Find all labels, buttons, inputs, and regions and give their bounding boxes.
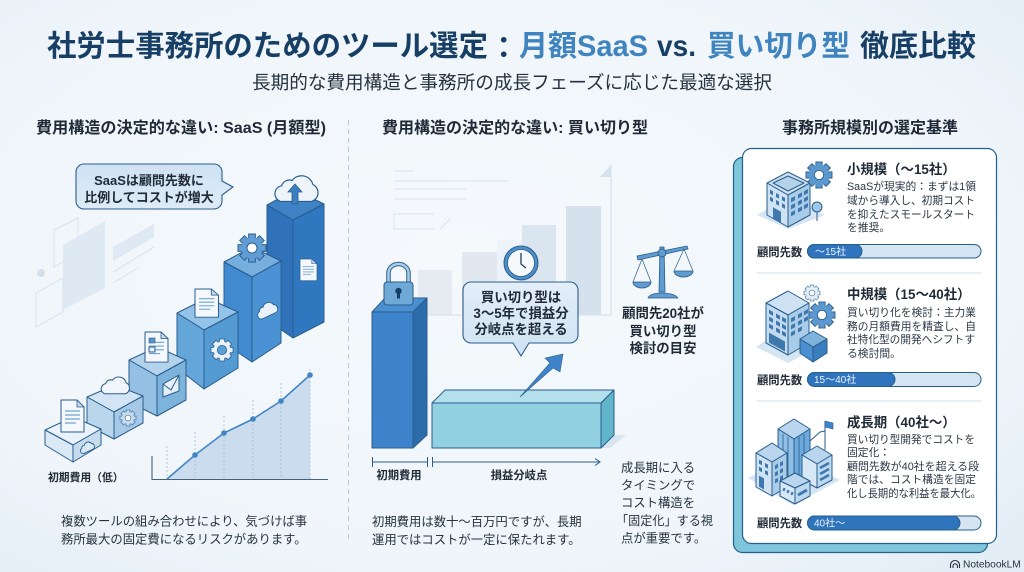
text: SaaS risk: 複数ツールの組み合わせにより、気づけば事 — [61, 514, 307, 528]
tier: medium: 中規模（15〜40社） — [847, 286, 971, 302]
tier: small — [757, 161, 981, 259]
tier: small: 顧問先数 — [757, 245, 803, 259]
stair step 1 with document and cloud — [45, 400, 101, 462]
tier: growth: 化し長期的な利益を最大化。 — [847, 486, 981, 500]
watermark: NotebookLM: NotebookLM — [963, 560, 1021, 570]
title: vs. — [657, 30, 696, 63]
text: SaaS risk — [61, 514, 307, 546]
progress bar: up to 15 clients — [808, 244, 981, 258]
tier: medium: 買い切り化を検討：主力業 — [847, 305, 976, 319]
tier: growth: 成長期（40社〜） — [847, 414, 956, 430]
title: 月額SaaS — [519, 30, 648, 63]
heading: selection criteria column: 事務所規模別の選定基準 — [782, 118, 958, 137]
tier: growth: 買い切り型開発でコストを — [847, 432, 975, 446]
stair step 4 with document and gear — [177, 289, 238, 389]
text: growth phase note: コスト構造を — [621, 496, 695, 510]
tall blue bar with lock: initial cost — [372, 264, 427, 448]
text: 20 clients guideline: 顧問先20社が — [622, 305, 705, 321]
label: initial cost: 初期費用 — [376, 468, 422, 482]
callout: SaaS cost grows: SaaSは顧問先数に — [94, 173, 204, 188]
tier: small: SaaSが現実的：まずは1領 — [847, 179, 976, 193]
line chart: cost growth — [152, 369, 328, 480]
label: initial cost low: 初期費用（低） — [48, 470, 124, 484]
text: growth phase note: タイミングで — [621, 478, 695, 492]
wide teal box: long-term flat cost — [432, 390, 626, 448]
tier: growth: 固定化： — [847, 446, 890, 459]
label: breakeven: 損益分岐点 — [491, 468, 547, 482]
stair step 5 with gear and cloud — [224, 234, 281, 362]
panel: buyout cost structure — [372, 165, 713, 547]
tier: medium: 務の月額費用を精査し、自 — [847, 319, 976, 333]
tier: growth: 階では、コスト構造を固定 — [847, 472, 976, 486]
text: buyout explanation — [372, 514, 582, 547]
timeline axis — [372, 457, 600, 467]
text: growth phase note — [616, 461, 713, 546]
text: 20 clients guideline: 検討の目安 — [630, 340, 696, 356]
text: 20 clients guideline: 買い切り型 — [630, 324, 696, 339]
text: growth phase note: 点が重要です。 — [621, 530, 706, 546]
tier: medium: 社特化型の開発へシフトす — [847, 332, 975, 346]
stair step 3 with checklist and envelope — [129, 332, 186, 416]
callout: breakeven in 3-5 years: 分岐点を超える — [474, 321, 568, 337]
text: buyout explanation: 運用ではコストが一定に保たれます。 — [372, 532, 581, 547]
callout: breakeven in 3-5 years: 買い切り型は — [481, 290, 561, 305]
title: 徹底比較 — [860, 30, 976, 63]
arrow: rising to breakeven — [520, 354, 563, 397]
title — [47, 30, 976, 65]
panel: SaaS cost structure — [36, 164, 328, 546]
progress bar: 40 clients or more: 40社〜 — [814, 516, 845, 530]
callout: SaaS cost grows — [76, 164, 233, 209]
text: SaaS risk: 務所最大の固定費になるリスクがあります。 — [61, 532, 307, 546]
tier: growth — [748, 414, 981, 530]
tier: medium: 顧問先数 — [757, 373, 803, 387]
tier: small: 域から導入し、初期コスト — [847, 193, 975, 207]
callout: breakeven in 3-5 years: 3〜5年で損益分 — [473, 305, 569, 321]
tier: growth: 顧問先数 — [757, 516, 803, 530]
progress bar: 40 clients or more — [808, 516, 981, 530]
tier: small: を抑えたスモールスタート — [847, 207, 975, 221]
heading: buyout column: 費用構造の決定的な違い: 買い切り型 — [382, 118, 648, 137]
progress bar: 15 to 40 clients — [808, 372, 981, 386]
tier: small: 小規模（〜15社） — [847, 161, 956, 177]
progress bar: up to 15 clients: 〜15社 — [815, 245, 846, 258]
text: growth phase note: 「固定化」する視 — [616, 514, 713, 528]
icon: small building — [757, 162, 832, 229]
panel: selection criteria by firm size — [734, 148, 996, 552]
text: buyout explanation: 初期費用は数十〜百万円ですが、長期 — [372, 514, 582, 529]
icon: medium building with gears and box — [756, 285, 835, 363]
title: ： — [489, 32, 519, 65]
text: growth phase note: 成長期に入る — [621, 461, 695, 475]
stair step 6 with upload cloud and document — [267, 176, 324, 338]
text: 20 clients guideline — [622, 305, 705, 356]
stair step 2 with cloud and gear — [87, 377, 143, 439]
title: 社労士事務所のためのツール選定 — [47, 30, 488, 63]
callout: breakeven in 3-5 years — [463, 282, 578, 356]
icon: balance scale — [633, 246, 693, 298]
tier: medium — [756, 285, 981, 387]
progress bar: 15 to 40 clients: 15〜40社 — [814, 373, 856, 386]
tier: medium: る検討間。 — [847, 346, 901, 360]
callout: SaaS cost grows: 比例してコストが増大 — [84, 190, 214, 205]
subtitle: 長期的な費用構造と事務所の成長フェーズに応じた最適な選択 — [252, 72, 773, 93]
tier: small: を推奨。 — [847, 220, 890, 234]
heading: SaaS column: 費用構造の決定的な違い: SaaS (月額型) — [36, 118, 326, 137]
icon: clock — [504, 246, 538, 280]
icon: growth building cluster — [748, 419, 840, 505]
title: 買い切り型 — [707, 30, 850, 63]
tier: growth: 顧問先数が40社を超える段 — [847, 459, 979, 473]
